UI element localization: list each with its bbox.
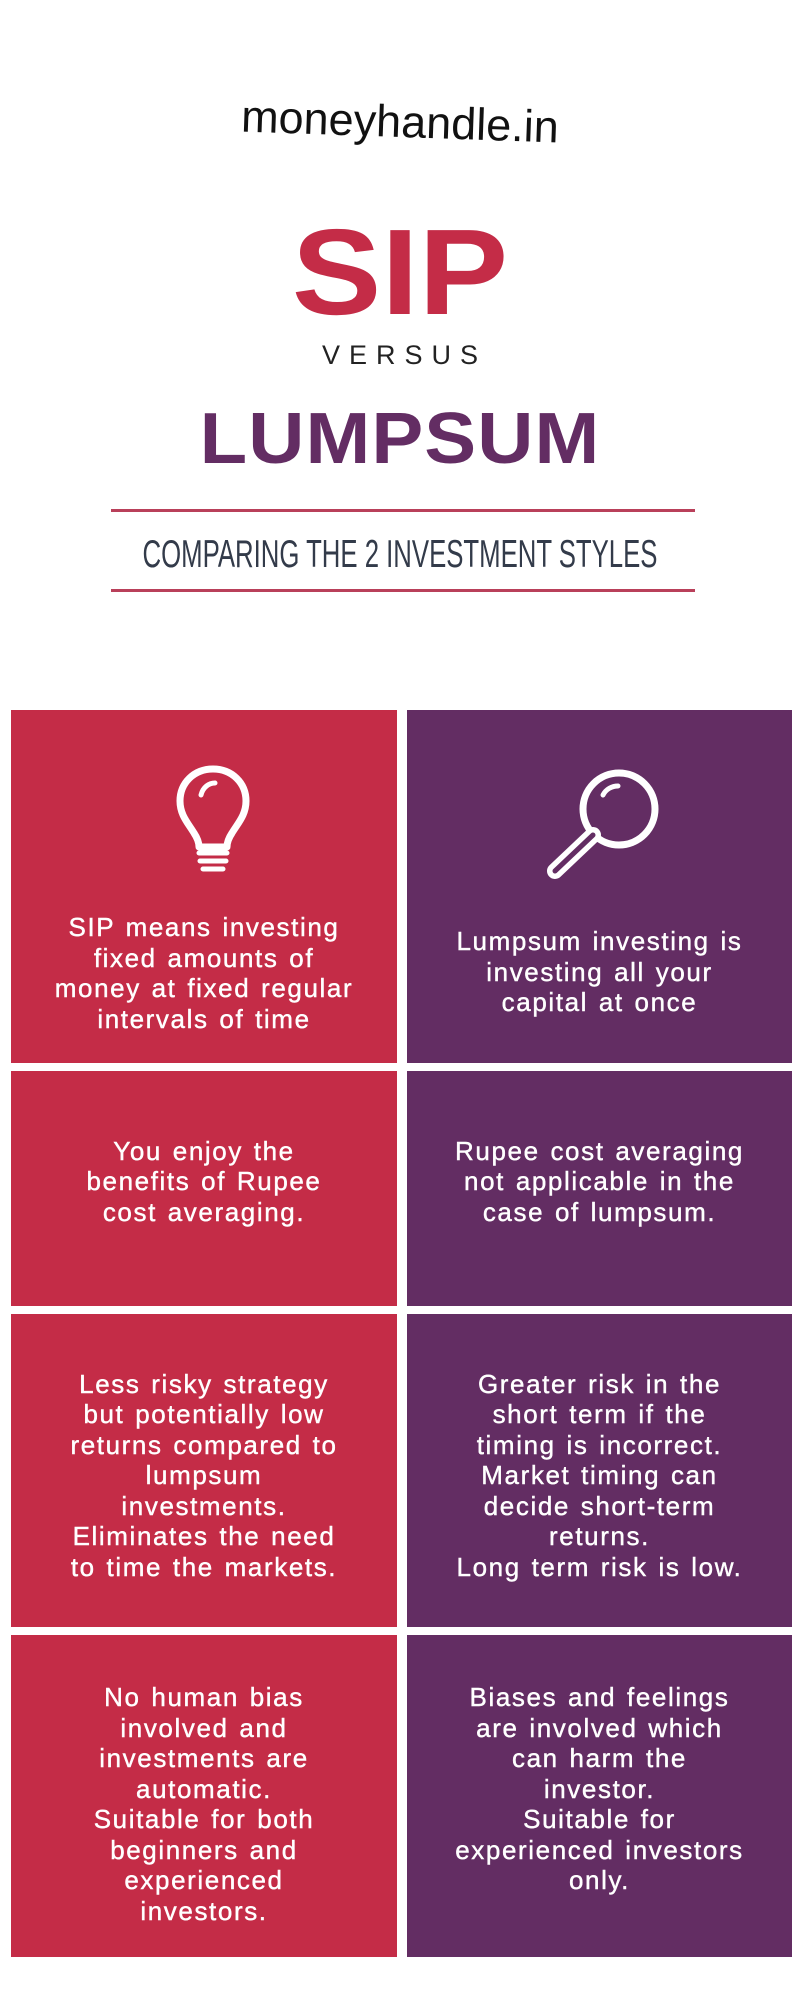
icon: magnifier <box>547 770 658 879</box>
panel: Lumpsum bias: are involved which <box>476 1713 723 1743</box>
panel: Lumpsum bias: only. <box>569 1865 630 1895</box>
text: investing all your <box>486 956 713 986</box>
panel: SIP definition <box>11 710 397 1063</box>
panel: SIP risk: but potentially low <box>83 1399 325 1429</box>
panel: Lumpsum rupee cost averaging: not applicable in the <box>464 1166 735 1196</box>
panel: Lumpsum risk: decide short-term <box>484 1491 715 1521</box>
panel: Lumpsum bias <box>407 1635 792 1957</box>
panel: SIP rupee cost averaging: You enjoy the <box>113 1136 295 1166</box>
panel: SIP bias: No human bias <box>104 1682 304 1712</box>
panel: SIP bias: investors. <box>140 1896 268 1926</box>
panel: Lumpsum risk: Market timing can <box>481 1460 718 1490</box>
panel: Lumpsum risk <box>407 1314 792 1627</box>
text: fixed amounts of <box>94 942 314 972</box>
text <box>55 912 353 1034</box>
panel: SIP bias: investments are <box>99 1743 309 1773</box>
panel: SIP rupee cost averaging: cost averaging. <box>103 1197 305 1227</box>
panel: SIP risk: investments. <box>121 1491 287 1521</box>
panel: Lumpsum rupee cost averaging <box>407 1071 792 1306</box>
text: SIP means investing <box>69 912 339 942</box>
text: Lumpsum investing is <box>456 926 742 956</box>
panel: Lumpsum rupee cost averaging: Rupee cost averaging <box>455 1136 744 1166</box>
title: SIP: SIP <box>292 204 508 340</box>
panel: Lumpsum bias: Suitable for <box>523 1804 676 1834</box>
icon: light bulb <box>176 766 250 872</box>
VERSUS: VERSUS <box>322 340 487 370</box>
panel: Lumpsum bias: Biases and feelings <box>470 1682 729 1712</box>
panel: Lumpsum bias: can harm the <box>512 1743 687 1773</box>
panel: Lumpsum risk: returns. <box>549 1521 650 1551</box>
panel: Lumpsum risk: timing is incorrect. <box>477 1430 722 1460</box>
panel: SIP bias: experienced <box>124 1865 284 1895</box>
panel: Lumpsum bias: investor. <box>544 1774 655 1804</box>
panel: SIP risk: returns compared to <box>70 1430 338 1460</box>
panel: Lumpsum risk: Greater risk in the <box>478 1369 721 1399</box>
panel: SIP bias <box>11 1635 397 1957</box>
text <box>456 926 742 1017</box>
panel: SIP bias: automatic. <box>136 1774 272 1804</box>
panel: SIP bias: involved and <box>120 1712 288 1742</box>
panel: SIP risk: Less risky strategy <box>79 1369 329 1399</box>
logo text: moneyhandle.in <box>240 90 560 153</box>
text: intervals of time <box>97 1004 311 1034</box>
text: money at fixed regular <box>55 973 353 1003</box>
text: capital at once <box>502 987 697 1017</box>
title: LUMPSUM: LUMPSUM <box>200 399 600 479</box>
panel: SIP risk: lumpsum <box>146 1460 262 1490</box>
panel: SIP rupee cost averaging <box>11 1071 397 1306</box>
panel: SIP risk: to time the markets. <box>71 1552 337 1582</box>
panel: SIP bias: beginners and <box>110 1834 298 1864</box>
panel: SIP bias: Suitable for both <box>94 1804 314 1834</box>
panel: Lumpsum rupee cost averaging: case of lumpsum. <box>483 1197 716 1227</box>
panel: SIP rupee cost averaging: benefits of Rupee <box>86 1166 322 1196</box>
panel: Lumpsum risk: Long term risk is low. <box>457 1552 742 1582</box>
panel: Lumpsum risk: short term if the <box>493 1399 706 1429</box>
panel: SIP risk <box>11 1314 397 1627</box>
panel: SIP risk: Eliminates the need <box>73 1521 335 1551</box>
panel: Lumpsum bias: experienced investors <box>455 1835 744 1865</box>
subtitle: COMPARING THE 2 INVESTMENT STYLES <box>143 533 657 576</box>
panel: Lumpsum definition <box>407 710 792 1063</box>
